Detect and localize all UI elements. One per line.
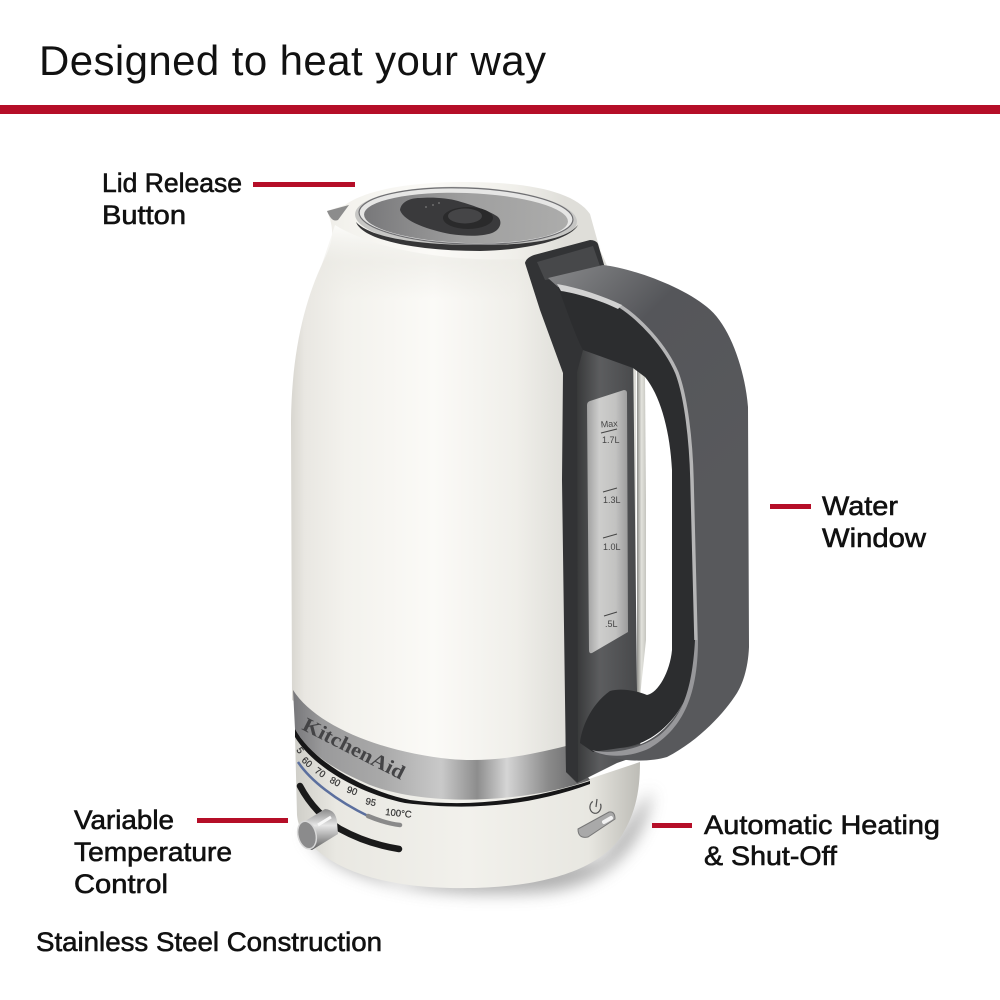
temperature scale: 80 <box>328 775 342 790</box>
shadow under kettle <box>305 790 652 893</box>
max mark: Max <box>600 418 619 429</box>
dark handle panel <box>563 345 642 783</box>
kettle product illustration <box>291 182 749 893</box>
trim bottom sweep <box>592 640 698 756</box>
silver body strip <box>637 366 646 697</box>
lid lower shadow line <box>356 222 578 251</box>
label: Water <box>822 491 898 521</box>
label line two: Button <box>102 200 186 230</box>
water window: .5L <box>605 619 618 629</box>
lid assembly <box>354 183 578 253</box>
leader line <box>770 504 811 509</box>
0.5 litre mark <box>604 612 617 616</box>
temperature scale: 95 <box>364 796 377 809</box>
power switch <box>578 799 615 837</box>
KitchenAid logo: KitchenAid <box>299 714 409 784</box>
temperature scale: 90 <box>345 784 359 798</box>
kettle body <box>291 182 636 770</box>
leader line <box>253 182 355 187</box>
leader line <box>652 823 692 828</box>
temperature knob <box>295 809 338 851</box>
temperature scale: 70 <box>312 765 327 781</box>
lid ring <box>358 184 574 248</box>
trim start highlight <box>557 284 622 309</box>
footer caption: Stainless Steel Construction <box>36 927 382 957</box>
handle outer grip <box>548 265 749 761</box>
1.0 litre mark <box>603 534 617 538</box>
callout: lid release button <box>102 168 355 230</box>
handle inner dark <box>558 287 696 752</box>
lid plate <box>363 189 569 247</box>
1.3 litre mark <box>603 488 617 492</box>
water window: 1.3L <box>603 495 621 505</box>
callout: variable temperature control <box>74 805 288 899</box>
water window: 1.7L <box>602 435 620 445</box>
title: Designed to heat your way <box>39 37 546 84</box>
label: Automatic Heating <box>704 810 940 840</box>
connector top <box>537 246 600 280</box>
temperature scale: 60 <box>299 755 314 770</box>
callout: automatic heating and shut-off <box>652 810 940 871</box>
water window: 1.0L <box>603 542 621 552</box>
left handle rail <box>525 240 605 782</box>
temperature scale <box>294 745 412 849</box>
spout tip <box>327 205 349 221</box>
header rule <box>0 105 1000 114</box>
lid rim <box>354 183 578 253</box>
power icon <box>589 801 602 814</box>
knob slot <box>300 786 399 849</box>
water window <box>587 390 628 653</box>
scale line <box>298 762 370 817</box>
label line two: Window <box>822 523 927 553</box>
handle silver trim <box>620 306 696 640</box>
body shoulder shading <box>310 225 605 300</box>
lid release button <box>443 207 493 229</box>
temperature numbers: 5 <box>294 745 306 756</box>
lid release button housing <box>400 198 500 236</box>
leader line <box>197 818 288 823</box>
window glass <box>587 390 628 653</box>
label line three: Control <box>74 869 168 899</box>
base seam <box>295 729 590 807</box>
temperature scale: 100°C <box>385 807 412 821</box>
stainless band <box>293 690 590 800</box>
switch <box>578 812 615 837</box>
kettle base <box>295 735 640 888</box>
callout: water window <box>770 491 927 553</box>
label line two: & Shut-Off <box>704 841 838 871</box>
label: Lid Release <box>102 168 242 198</box>
button dots <box>425 203 440 207</box>
label: Variable <box>74 805 174 835</box>
label line two: Temperature <box>74 837 232 867</box>
